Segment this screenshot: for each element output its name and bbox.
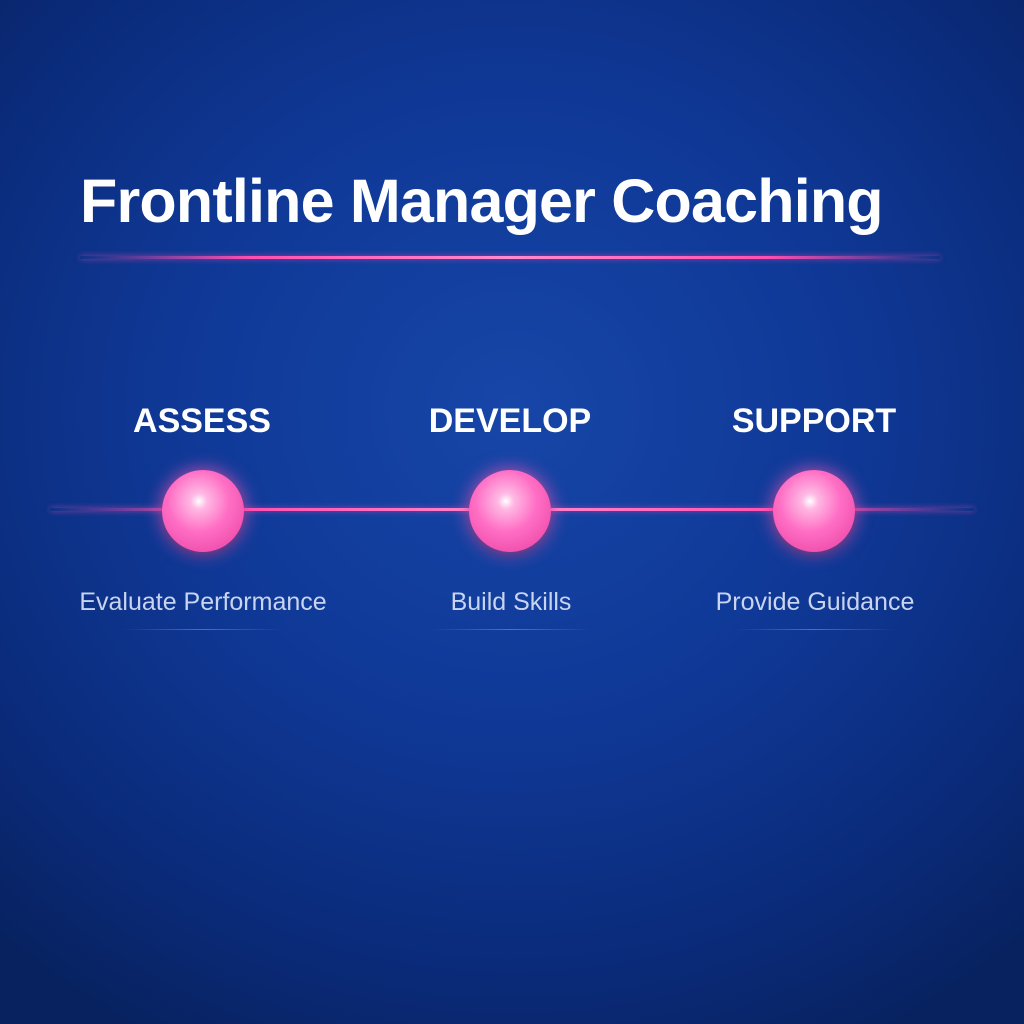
description: develop: Build Skills	[451, 588, 571, 616]
node: assess	[162, 470, 244, 552]
heading: assess: ASSESS	[133, 402, 271, 440]
step: assess	[79, 402, 327, 630]
title underline glow	[80, 256, 940, 259]
step: develop	[429, 402, 591, 630]
node: develop	[469, 470, 551, 552]
node: support	[773, 470, 855, 552]
title: Frontline Manager Coaching	[80, 167, 883, 235]
description: support: Provide Guidance	[716, 588, 914, 616]
timeline line	[50, 508, 974, 511]
step: support	[716, 402, 914, 630]
heading: support: SUPPORT	[732, 402, 896, 440]
heading: develop: DEVELOP	[429, 402, 591, 440]
description: assess: Evaluate Performance	[79, 588, 327, 616]
